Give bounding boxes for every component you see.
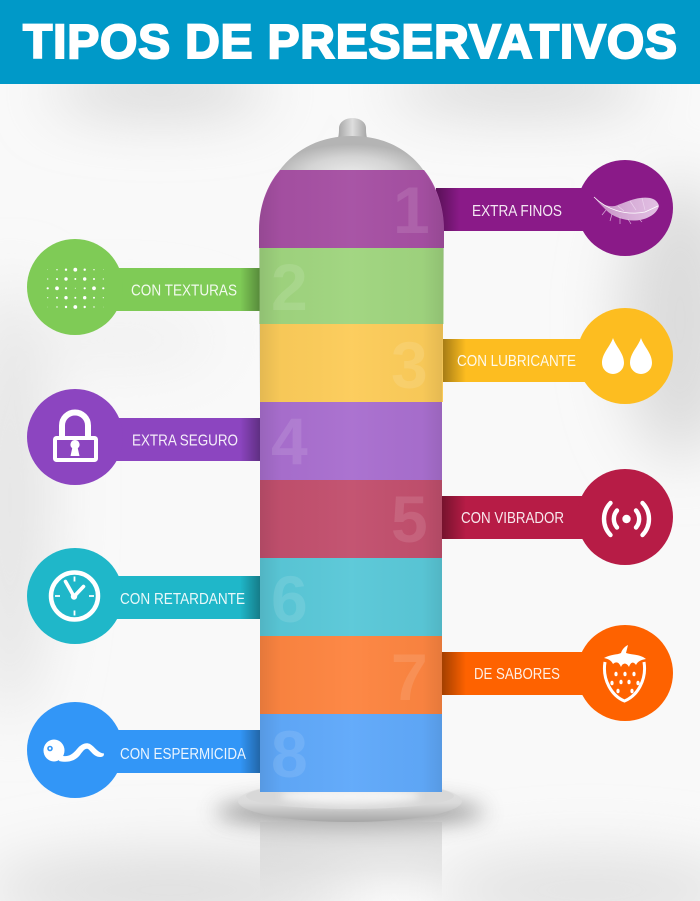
band 4: violet (260, 402, 442, 480)
callout: con vibrador (442, 469, 673, 565)
number 1: 1 (393, 173, 430, 247)
label: CON LUBRICANTE (457, 353, 576, 370)
band 1: purple (259, 170, 444, 248)
number 3: 3 (391, 328, 428, 402)
callout: de sabores (442, 625, 673, 721)
callout: con lubricante (442, 308, 673, 404)
icon: padlock (55, 412, 96, 460)
icon: clock (51, 572, 98, 620)
label: CON VIBRADOR (461, 510, 564, 527)
label: CON ESPERMICIDA (120, 746, 246, 763)
number 8: 8 (271, 717, 308, 791)
callout: con retardante (27, 548, 260, 644)
callout: con texturas (27, 239, 260, 335)
label: CON TEXTURAS (131, 282, 237, 300)
icon: texture dots (47, 268, 104, 309)
band 7: orange (260, 636, 442, 714)
header banner (0, 0, 700, 84)
icon: feather (594, 197, 659, 224)
band 6: teal (260, 558, 442, 636)
floor shadow and reflection (215, 798, 485, 901)
band 5: red (260, 480, 442, 558)
label: CON RETARDANTE (120, 591, 245, 608)
icon: vibration (604, 503, 649, 535)
band 8: blue (260, 714, 442, 792)
condom dome (279, 136, 424, 171)
title: TIPOS DE PRESERVATIVOS (23, 16, 677, 69)
label: EXTRA SEGURO (132, 432, 238, 450)
number 4: 4 (271, 404, 308, 478)
condom bands (259, 170, 444, 792)
number 6: 6 (271, 562, 308, 636)
band 3: yellow (260, 324, 443, 402)
icon: sperm (44, 740, 104, 762)
condom tip (338, 118, 367, 138)
callout: extra seguro (27, 389, 260, 485)
number 2: 2 (271, 250, 308, 324)
label: DE SABORES (474, 666, 560, 683)
icon: drops (602, 338, 652, 374)
callout: extra finos (436, 160, 673, 256)
icon: strawberry (604, 645, 646, 701)
condom ring base (238, 780, 462, 822)
band 2: green (260, 248, 444, 324)
number 5: 5 (391, 482, 428, 556)
number 7: 7 (391, 640, 428, 714)
label: EXTRA FINOS (472, 203, 562, 220)
callout: con espermicida (27, 702, 260, 798)
